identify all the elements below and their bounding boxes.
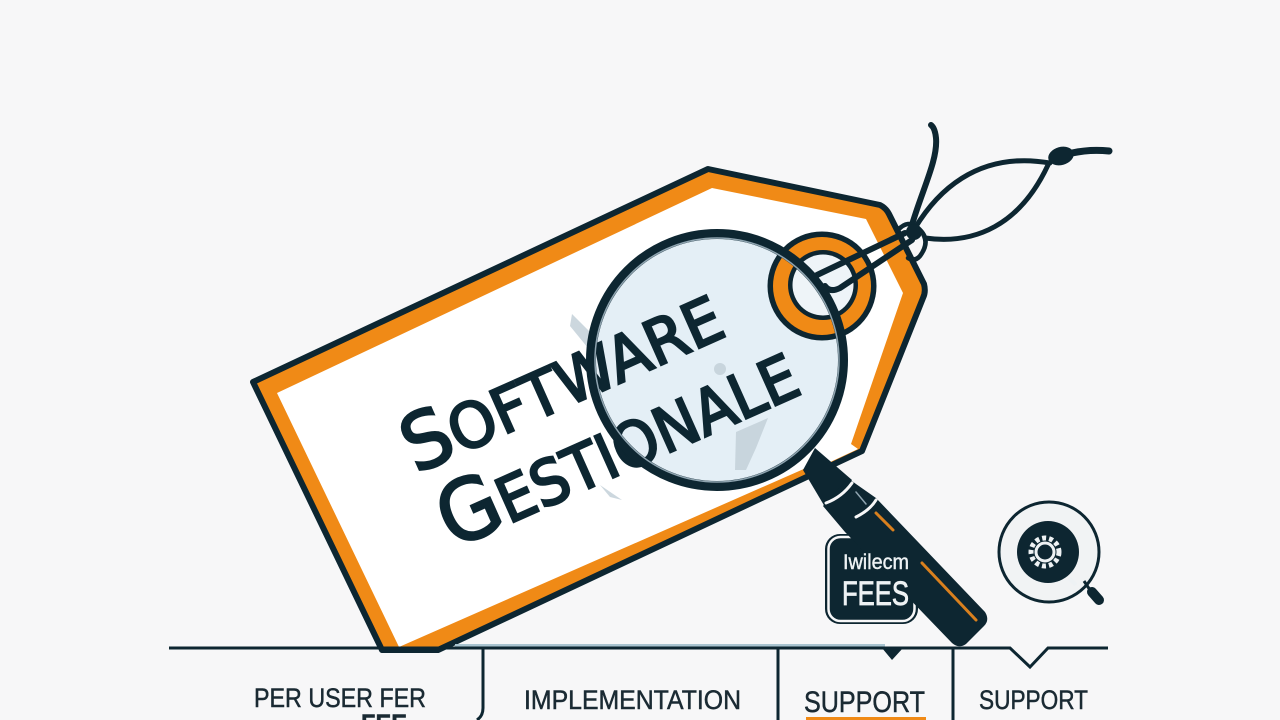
price tag bbox=[253, 169, 925, 650]
handle grip bbox=[823, 478, 987, 646]
title line: Gestionale: GESTIONALE bbox=[421, 322, 812, 567]
label: per user fee: PER USER FER bbox=[254, 683, 426, 713]
fees badge box bbox=[825, 534, 918, 624]
lens rim bbox=[591, 234, 843, 486]
handle collar highlights bbox=[826, 483, 876, 517]
label: implementation: IMPLEMENTATION bbox=[524, 685, 741, 715]
handle neck bbox=[803, 448, 852, 507]
lens smudges bbox=[570, 314, 768, 500]
tag white inner panel bbox=[277, 188, 903, 647]
handle orange accents bbox=[876, 513, 976, 620]
tag title bbox=[387, 270, 812, 567]
icon: gear magnifier bbox=[999, 502, 1099, 602]
badge small text: Iwilecm bbox=[843, 551, 909, 574]
string bbox=[817, 125, 1109, 290]
tag body bbox=[253, 169, 925, 650]
label: support highlighted: SUPPORT bbox=[804, 686, 925, 719]
badge label: FEES bbox=[842, 575, 909, 613]
title line: Software: SOFTWARE bbox=[387, 270, 736, 491]
label: support: SUPPORT bbox=[979, 685, 1088, 715]
fees badge text bbox=[842, 551, 909, 613]
magnifier lens glass bbox=[590, 233, 844, 487]
baseline rule and dividers bbox=[169, 646, 1108, 720]
eyelet ring bbox=[768, 232, 876, 340]
magnifying glass bbox=[591, 234, 987, 646]
